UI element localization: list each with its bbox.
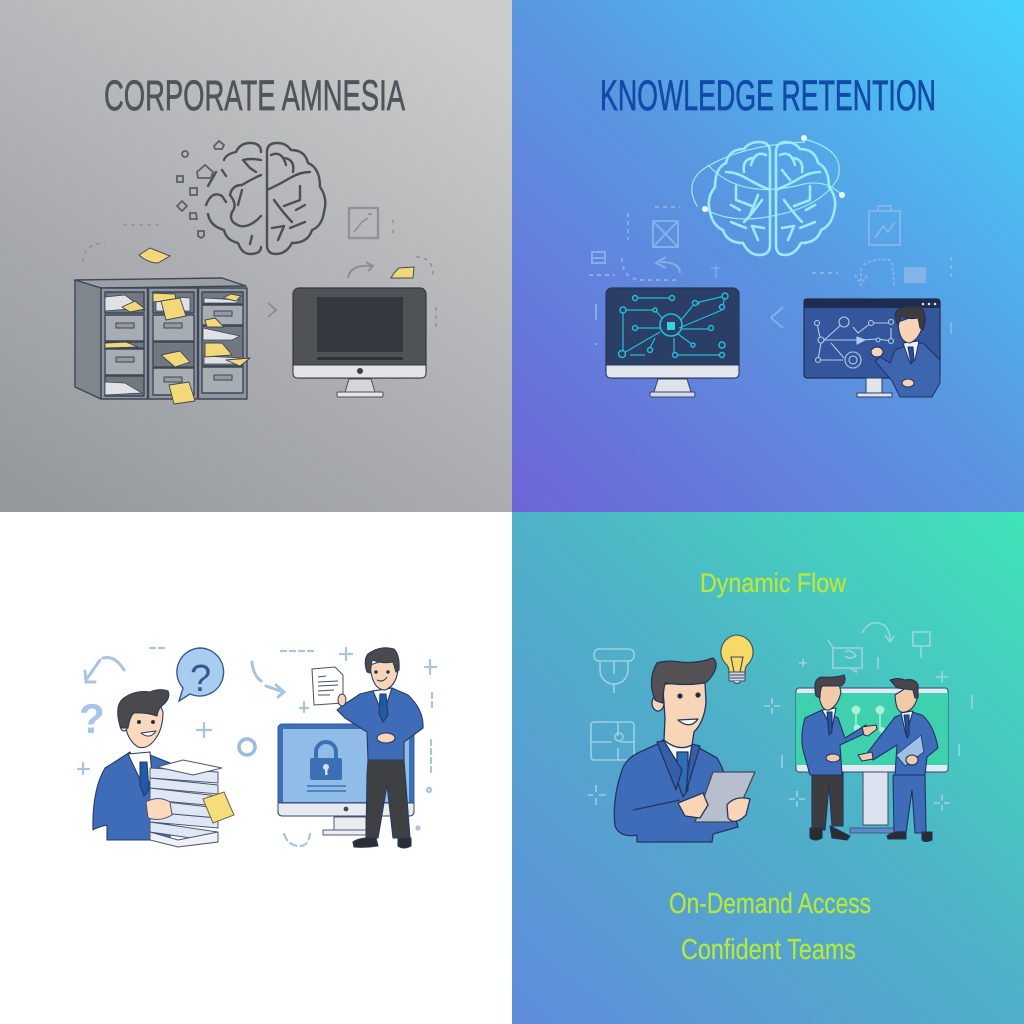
panel: white scenario bbox=[0, 512, 512, 1024]
monitor with padlock bbox=[278, 724, 414, 835]
illustration: filing cabinets bbox=[75, 278, 250, 404]
icon: chevron bbox=[268, 303, 276, 317]
panel: corporate amnesia bbox=[0, 0, 512, 512]
question mark: ? bbox=[79, 695, 105, 742]
two colleagues bbox=[802, 675, 938, 842]
person with paper stack bbox=[93, 690, 170, 840]
padlock bbox=[307, 742, 346, 791]
paper stack bbox=[146, 760, 222, 847]
icon: fragmenting brain bbox=[206, 143, 325, 254]
network diagram bbox=[618, 293, 728, 358]
whiteboard display bbox=[796, 688, 948, 833]
icon: monitor sticky note bbox=[391, 267, 414, 278]
illustration: network monitor bbox=[606, 288, 739, 397]
illustration: blank monitor bbox=[293, 288, 426, 397]
dashed arcs bbox=[83, 225, 436, 330]
text: on-demand access: On-Demand Access bbox=[669, 888, 871, 920]
speech bubble: question: ? bbox=[190, 658, 211, 700]
text: confident teams: Confident Teams bbox=[681, 934, 856, 966]
person with tablet bbox=[614, 658, 755, 842]
brain orbit nodes bbox=[702, 135, 845, 212]
icon: glowing brain bbox=[692, 139, 842, 255]
document bbox=[312, 667, 346, 706]
panel: knowledge retention bbox=[512, 0, 1024, 512]
icon: frame faint bbox=[349, 208, 393, 238]
sticky note bbox=[203, 792, 234, 823]
illustration: presenter monitor bbox=[804, 299, 940, 397]
faint symbols bbox=[78, 648, 436, 846]
flow diagram bbox=[814, 317, 894, 368]
icon: lightbulb bbox=[721, 635, 753, 684]
faint icons bbox=[588, 623, 972, 811]
panel: dynamic flow bbox=[512, 512, 1024, 1024]
speech bubble: question bbox=[177, 648, 224, 701]
faint icons bbox=[589, 206, 951, 345]
heading: dynamic flow: Dynamic Flow bbox=[700, 568, 846, 598]
icon: curved arrow bbox=[348, 262, 373, 278]
tablet bbox=[695, 772, 755, 822]
heading: corporate amnesia: CORPORATE AMNESIA bbox=[104, 72, 405, 120]
person presenting document bbox=[337, 648, 423, 848]
icon: flying sticky note bbox=[139, 248, 170, 263]
brain fragments bbox=[177, 141, 224, 238]
presenter bbox=[871, 306, 940, 397]
